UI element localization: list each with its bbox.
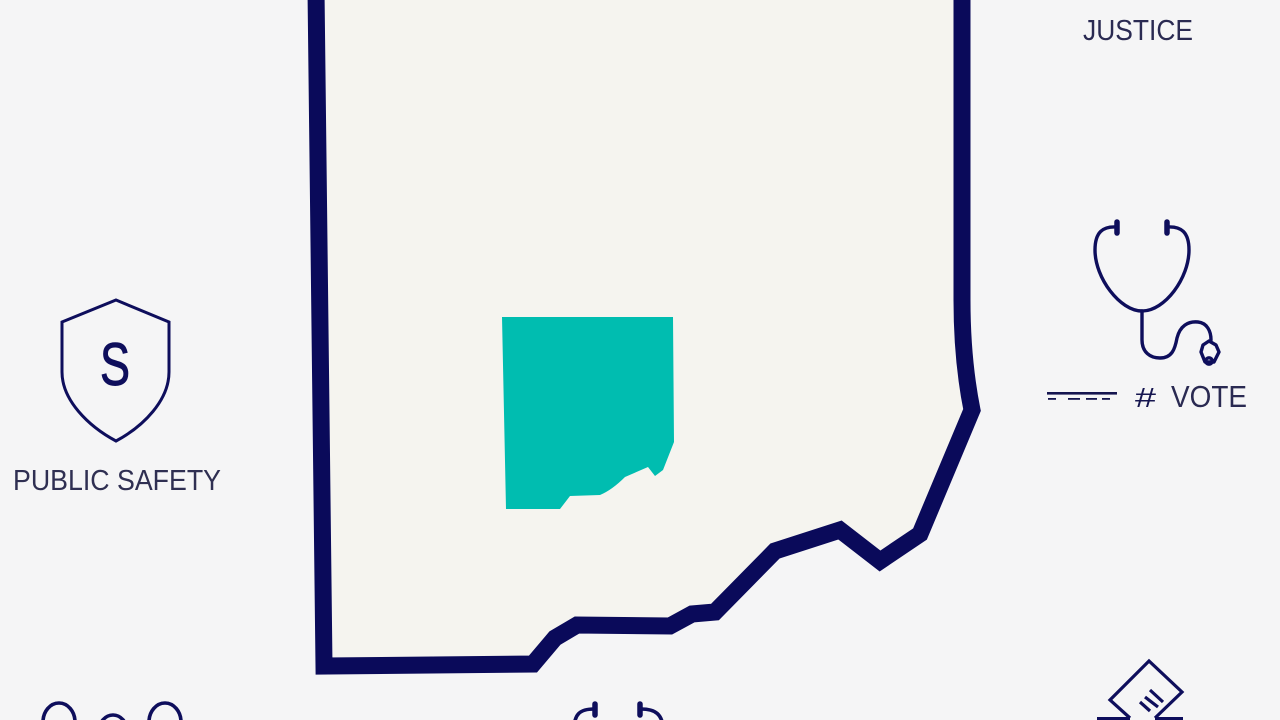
shield letter: S — [100, 331, 130, 398]
icon: people, cropped at bottom — [43, 703, 181, 720]
vote label: VOTE — [1171, 379, 1247, 414]
icon: shield — [62, 300, 169, 441]
icon: justice label: JUSTICE — [1083, 15, 1193, 47]
icon: ballot box, cropped at bottom — [1097, 661, 1183, 719]
public safety label: PUBLIC SAFETY — [13, 465, 221, 497]
icon: stethoscope, cropped at bottom — [574, 704, 663, 720]
icon: stethoscope — [1095, 222, 1219, 364]
garbled caption beside vote — [1047, 392, 1117, 400]
garbled glyph before vote: # — [1135, 382, 1157, 413]
map: state outline — [316, 0, 972, 666]
highlighted county — [502, 317, 674, 509]
